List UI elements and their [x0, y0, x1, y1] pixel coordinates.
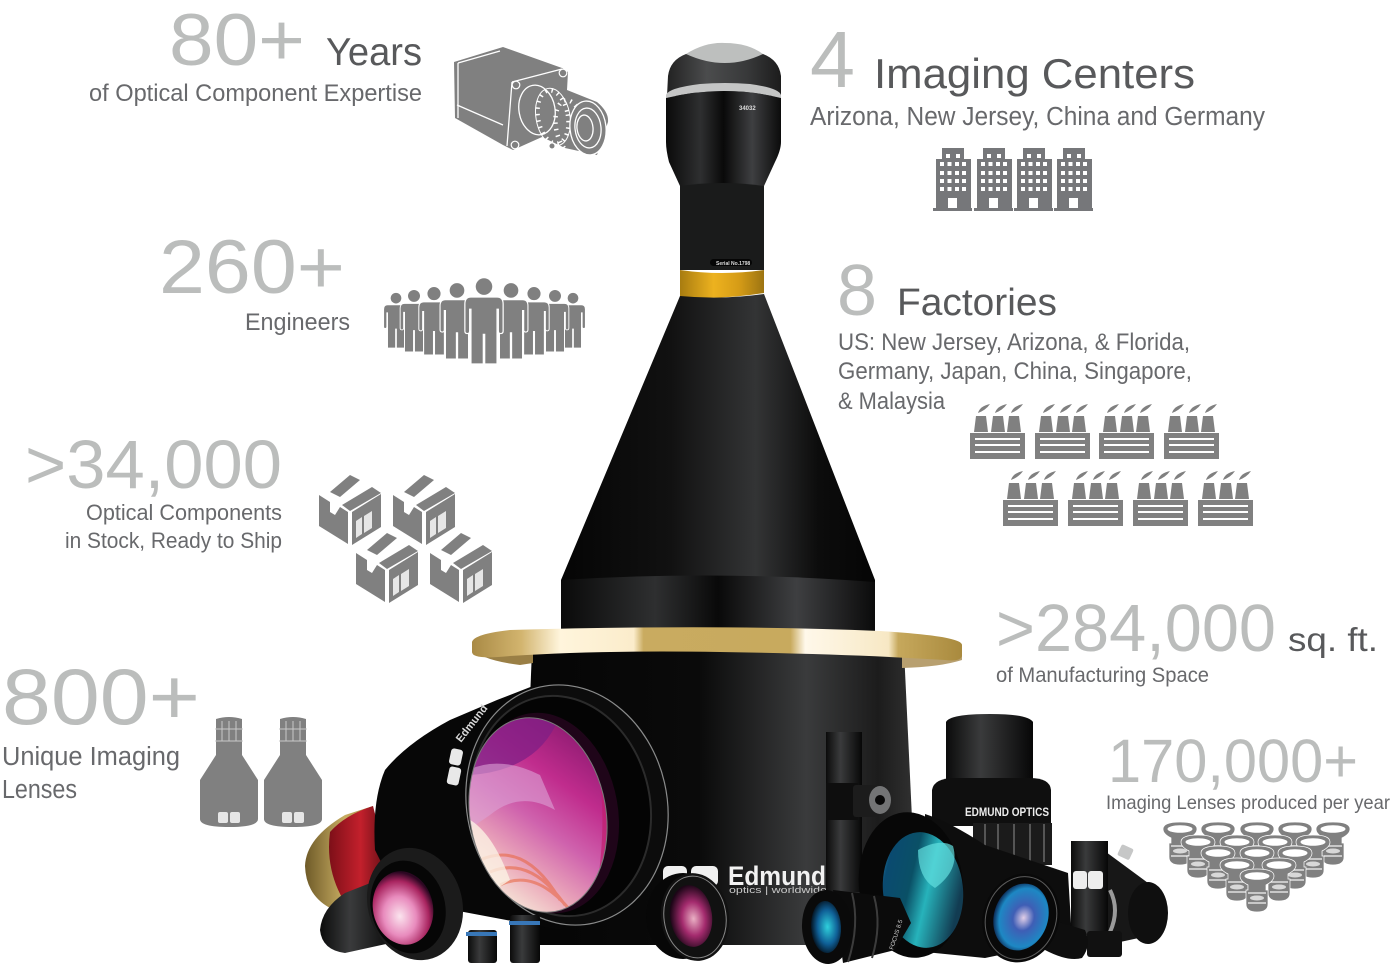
- icon: boxes: [319, 475, 492, 603]
- photo: center lens: [646, 869, 735, 965]
- lens label: EDMUND OPTICS: [965, 807, 1049, 819]
- gold flange: [472, 627, 962, 668]
- heading: Factories: Factories: [897, 282, 1057, 324]
- icon: lens bottles: [200, 717, 322, 827]
- lower band: [561, 575, 875, 632]
- text: factory line 3: & Malaysia: [838, 388, 946, 415]
- text: manufacturing space: of Manufacturing Space: [996, 663, 1209, 687]
- stat: 800+ lenses: [2, 652, 200, 804]
- lens cap: [667, 54, 781, 96]
- photo: telecentric lens: [932, 714, 1052, 865]
- serial label: Serial No.1798: [716, 261, 750, 267]
- text: optical expertise: of Optical Component Expertise: [89, 80, 422, 107]
- lower cylinder: [520, 650, 918, 945]
- photo: large tower lens: [472, 43, 962, 945]
- magenta glass: [469, 718, 607, 912]
- icon: group of people: [384, 278, 585, 364]
- logo text: Edmund: [728, 861, 826, 891]
- heading: Imaging Centers: Imaging Centers: [874, 50, 1195, 97]
- icon: factories: [970, 404, 1253, 526]
- photo: red and brass lens: [305, 806, 392, 908]
- photo: blue lens: [971, 863, 1088, 965]
- photo: small cyan lens: FOCUS 8.5: [889, 919, 905, 951]
- serial label: [710, 259, 752, 267]
- stat: 80+ years: [89, 0, 422, 107]
- text: unique imaging: Unique Imaging: [2, 743, 180, 771]
- number: 170,000+: 170,000+: [1108, 727, 1358, 795]
- photo: column with knob: [826, 732, 891, 892]
- barrel: [374, 686, 640, 930]
- number: 4: 4: [810, 15, 855, 104]
- photo: cyan lens: [852, 807, 1072, 963]
- heading: sq. ft.: sq. ft.: [1288, 621, 1378, 658]
- text: center locations: Arizona, New Jersey, China and Germany: [810, 103, 1265, 131]
- photo: small cylinders: [466, 915, 540, 963]
- icon: camera: [454, 47, 609, 157]
- text: optical components: Optical Components: [86, 500, 282, 525]
- gold ring: [680, 270, 764, 298]
- icon: buildings: [933, 148, 1093, 211]
- photo: large magenta lens: [374, 684, 669, 926]
- barrel branding: [446, 703, 490, 786]
- text: in stock: in Stock, Ready to Ship: [65, 528, 282, 553]
- photo: short column: [1071, 841, 1122, 957]
- icon: lens pyramid: [1163, 822, 1350, 912]
- logo text: optics | worldwide: [729, 885, 827, 896]
- text: factory line 1: US: New Jersey, Arizona, & Florida,: [838, 329, 1190, 356]
- number: >284,000: >284,000: [996, 591, 1276, 666]
- number: 800+: 800+: [2, 652, 200, 741]
- number: 80+: 80+: [169, 0, 305, 81]
- stat: 8 factories: [837, 251, 1192, 415]
- photo: right angle body: [1106, 844, 1168, 945]
- heading: Years: Years: [326, 31, 422, 74]
- number: 260+: 260+: [159, 225, 345, 310]
- stat: lenses per year: [1106, 727, 1390, 814]
- lens front dome: [680, 43, 768, 68]
- photo: small cyan lens: [800, 889, 911, 965]
- number: 8: 8: [837, 251, 877, 331]
- cone: [561, 294, 875, 632]
- stat: manufacturing space: [996, 591, 1378, 687]
- text: Engineers: Engineers: [245, 309, 350, 336]
- number: >34,000: >34,000: [25, 426, 282, 503]
- front rim: [441, 663, 693, 947]
- stat: 4 imaging centers: [810, 15, 1265, 131]
- model number: 34032: [739, 106, 756, 112]
- stat: 34,000 components: [25, 426, 282, 553]
- text: lenses: Lenses: [2, 776, 77, 804]
- photo: small magenta lens: [320, 835, 477, 965]
- text: factory line 2: Germany, Japan, China, Singapore,: [838, 358, 1192, 385]
- logo text: [663, 861, 827, 896]
- silver ring: [666, 83, 781, 98]
- barrel branding: Edmund: [454, 703, 490, 745]
- tapered barrel: [666, 91, 781, 270]
- stat: 260+ engineers: [159, 225, 350, 336]
